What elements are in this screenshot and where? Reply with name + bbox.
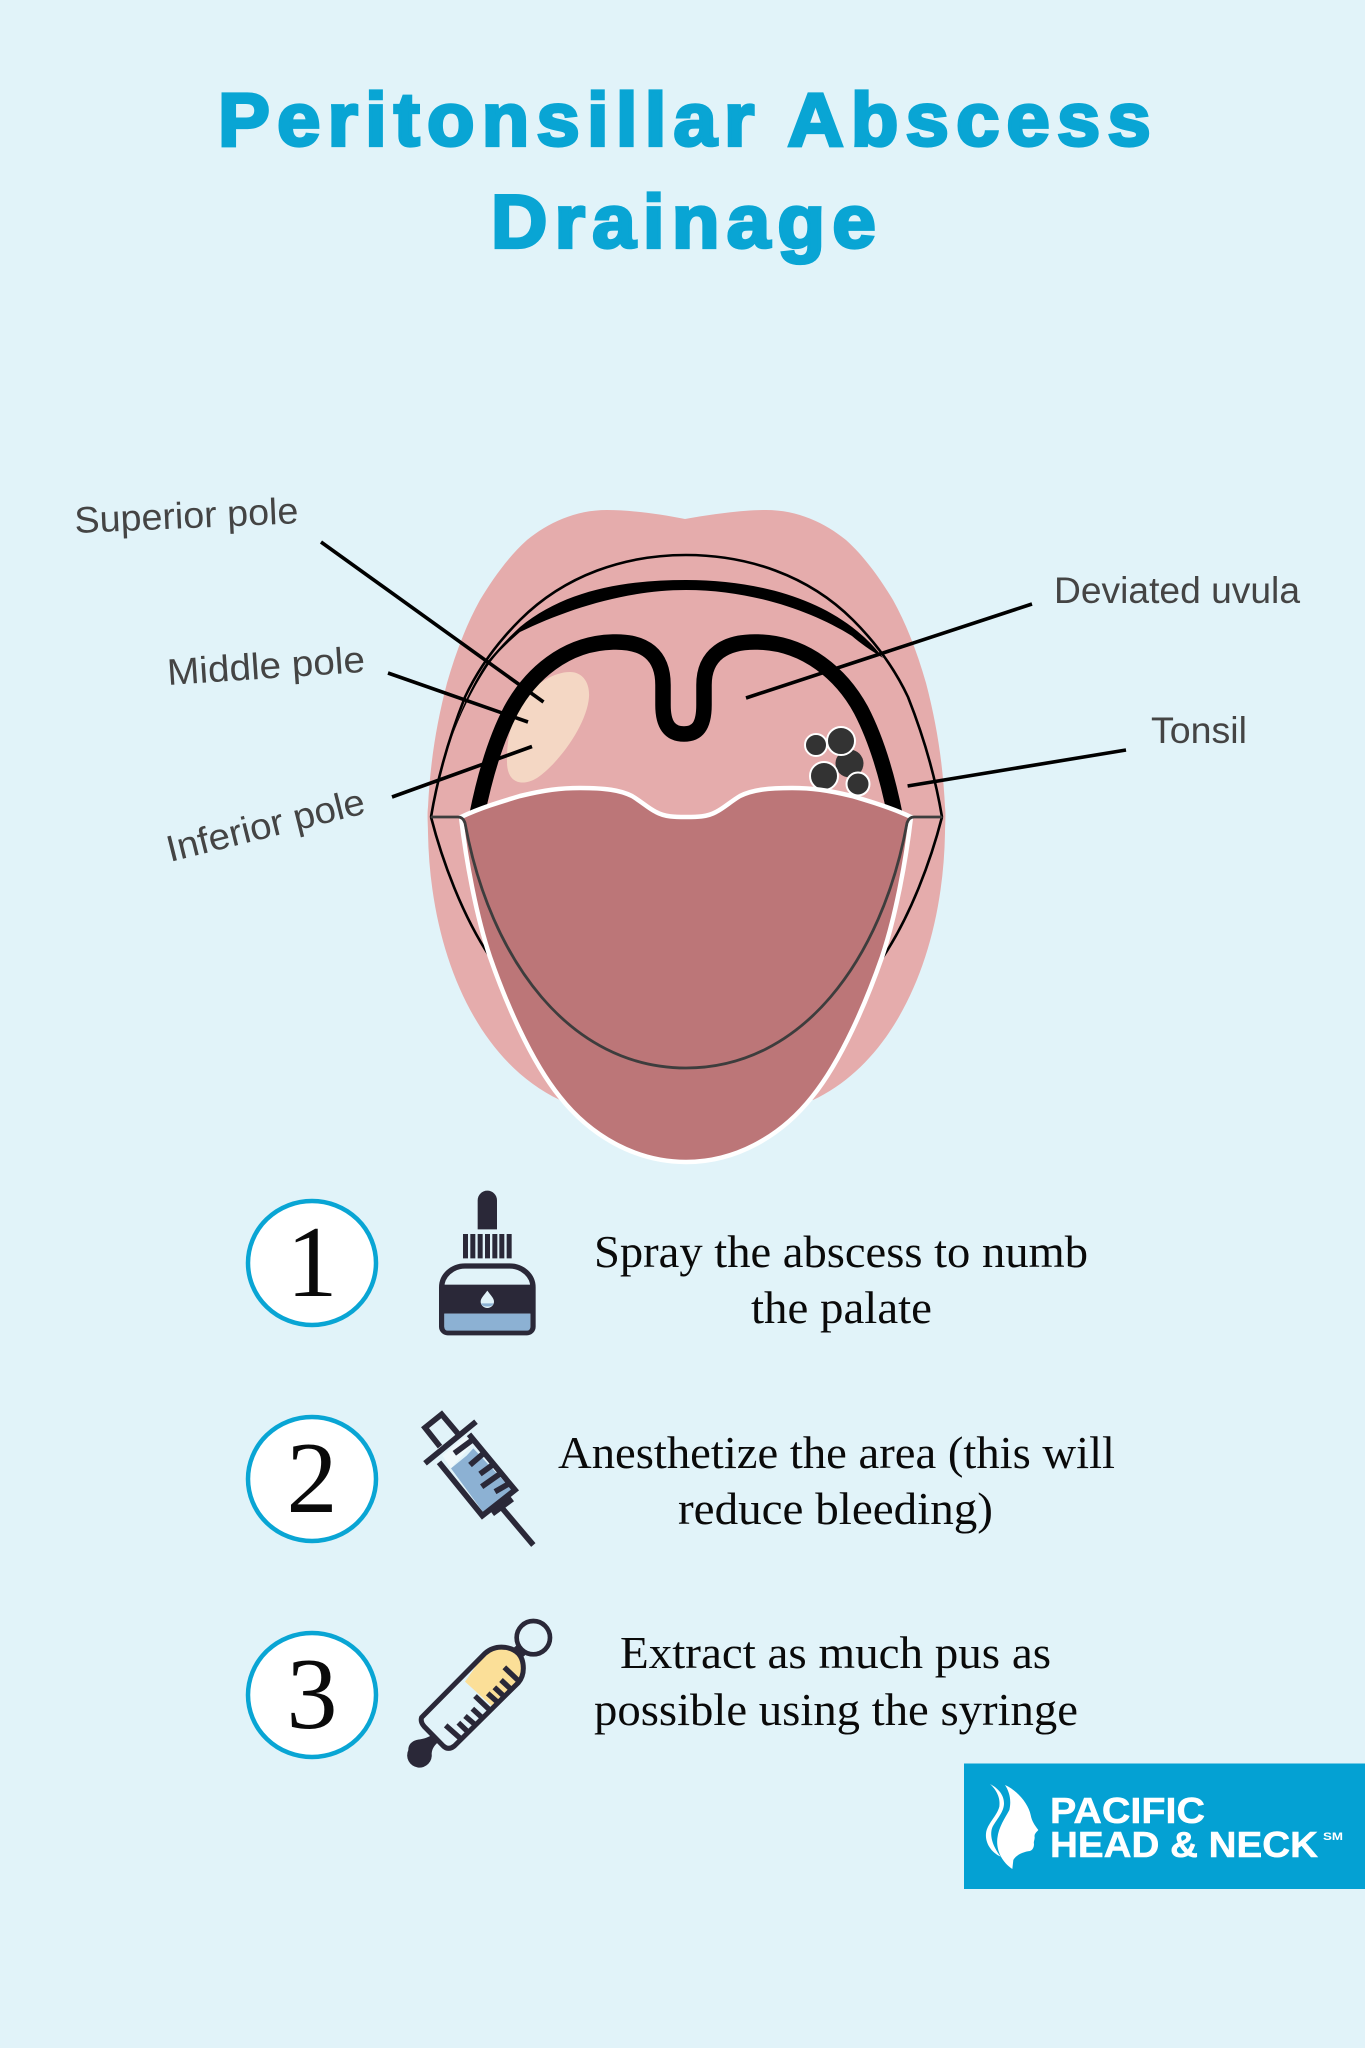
uvula and arch outline (477, 642, 895, 815)
icon: syringe with anesthetic (425, 1414, 533, 1545)
label: deviated uvula: Deviated uvula (1054, 570, 1300, 611)
step 2 text: Anesthetize the area (this will (558, 1427, 1115, 1478)
pointer: superior pole (321, 542, 544, 702)
tongue inner curve (431, 817, 942, 1068)
step 2 text (558, 1427, 1115, 1534)
logo: Pacific Head & Neck: PACIFIC (1050, 1790, 1205, 1831)
label: superior pole: Superior pole (74, 490, 299, 541)
step 2 number: 2 (286, 1422, 338, 1535)
step 2 text: reduce bleeding) (678, 1483, 993, 1534)
abscess swelling (507, 672, 589, 783)
pointer: inferior pole (392, 746, 532, 797)
pointer: deviated uvula (746, 604, 1032, 698)
logo: Pacific Head & Neck: SM (1323, 1831, 1343, 1843)
tonsil stones (805, 727, 870, 796)
pointer: tonsil (908, 750, 1126, 786)
title (218, 78, 1158, 264)
thin palate arch (431, 555, 942, 957)
label: middle pole: Middle pole (166, 639, 366, 693)
step 1 text: Spray the abscess to numb (594, 1226, 1088, 1277)
title: Peritonsillar Abscess (218, 78, 1158, 162)
step 1 number (248, 1201, 376, 1325)
icon: syringe with pus (407, 1621, 550, 1768)
pointer: middle pole (388, 673, 528, 722)
tongue (461, 788, 911, 1162)
step 1 text (594, 1226, 1088, 1333)
step 1 number: 1 (286, 1206, 338, 1319)
title: Drainage (491, 180, 883, 264)
step 3 text: possible using the syringe (594, 1684, 1078, 1735)
step 2 number (248, 1417, 376, 1541)
label: inferior pole: Inferior pole (162, 781, 369, 870)
step 3 number: 3 (286, 1638, 338, 1751)
throat diagram (428, 510, 945, 1162)
logo icon: face profile (986, 1784, 1038, 1869)
step 3 number (248, 1633, 376, 1757)
step 3 text: Extract as much pus as (620, 1627, 1051, 1678)
soft palate band (452, 580, 883, 737)
icon: spray bottle (442, 1191, 533, 1333)
step 1 text: the palate (751, 1282, 932, 1333)
logo: Pacific Head & Neck (964, 1764, 1365, 1889)
lips (428, 510, 945, 1100)
step 3 text (594, 1627, 1078, 1735)
logo: Pacific Head & Neck: HEAD & NECK (1050, 1824, 1318, 1865)
label: tonsil: Tonsil (1151, 710, 1247, 751)
